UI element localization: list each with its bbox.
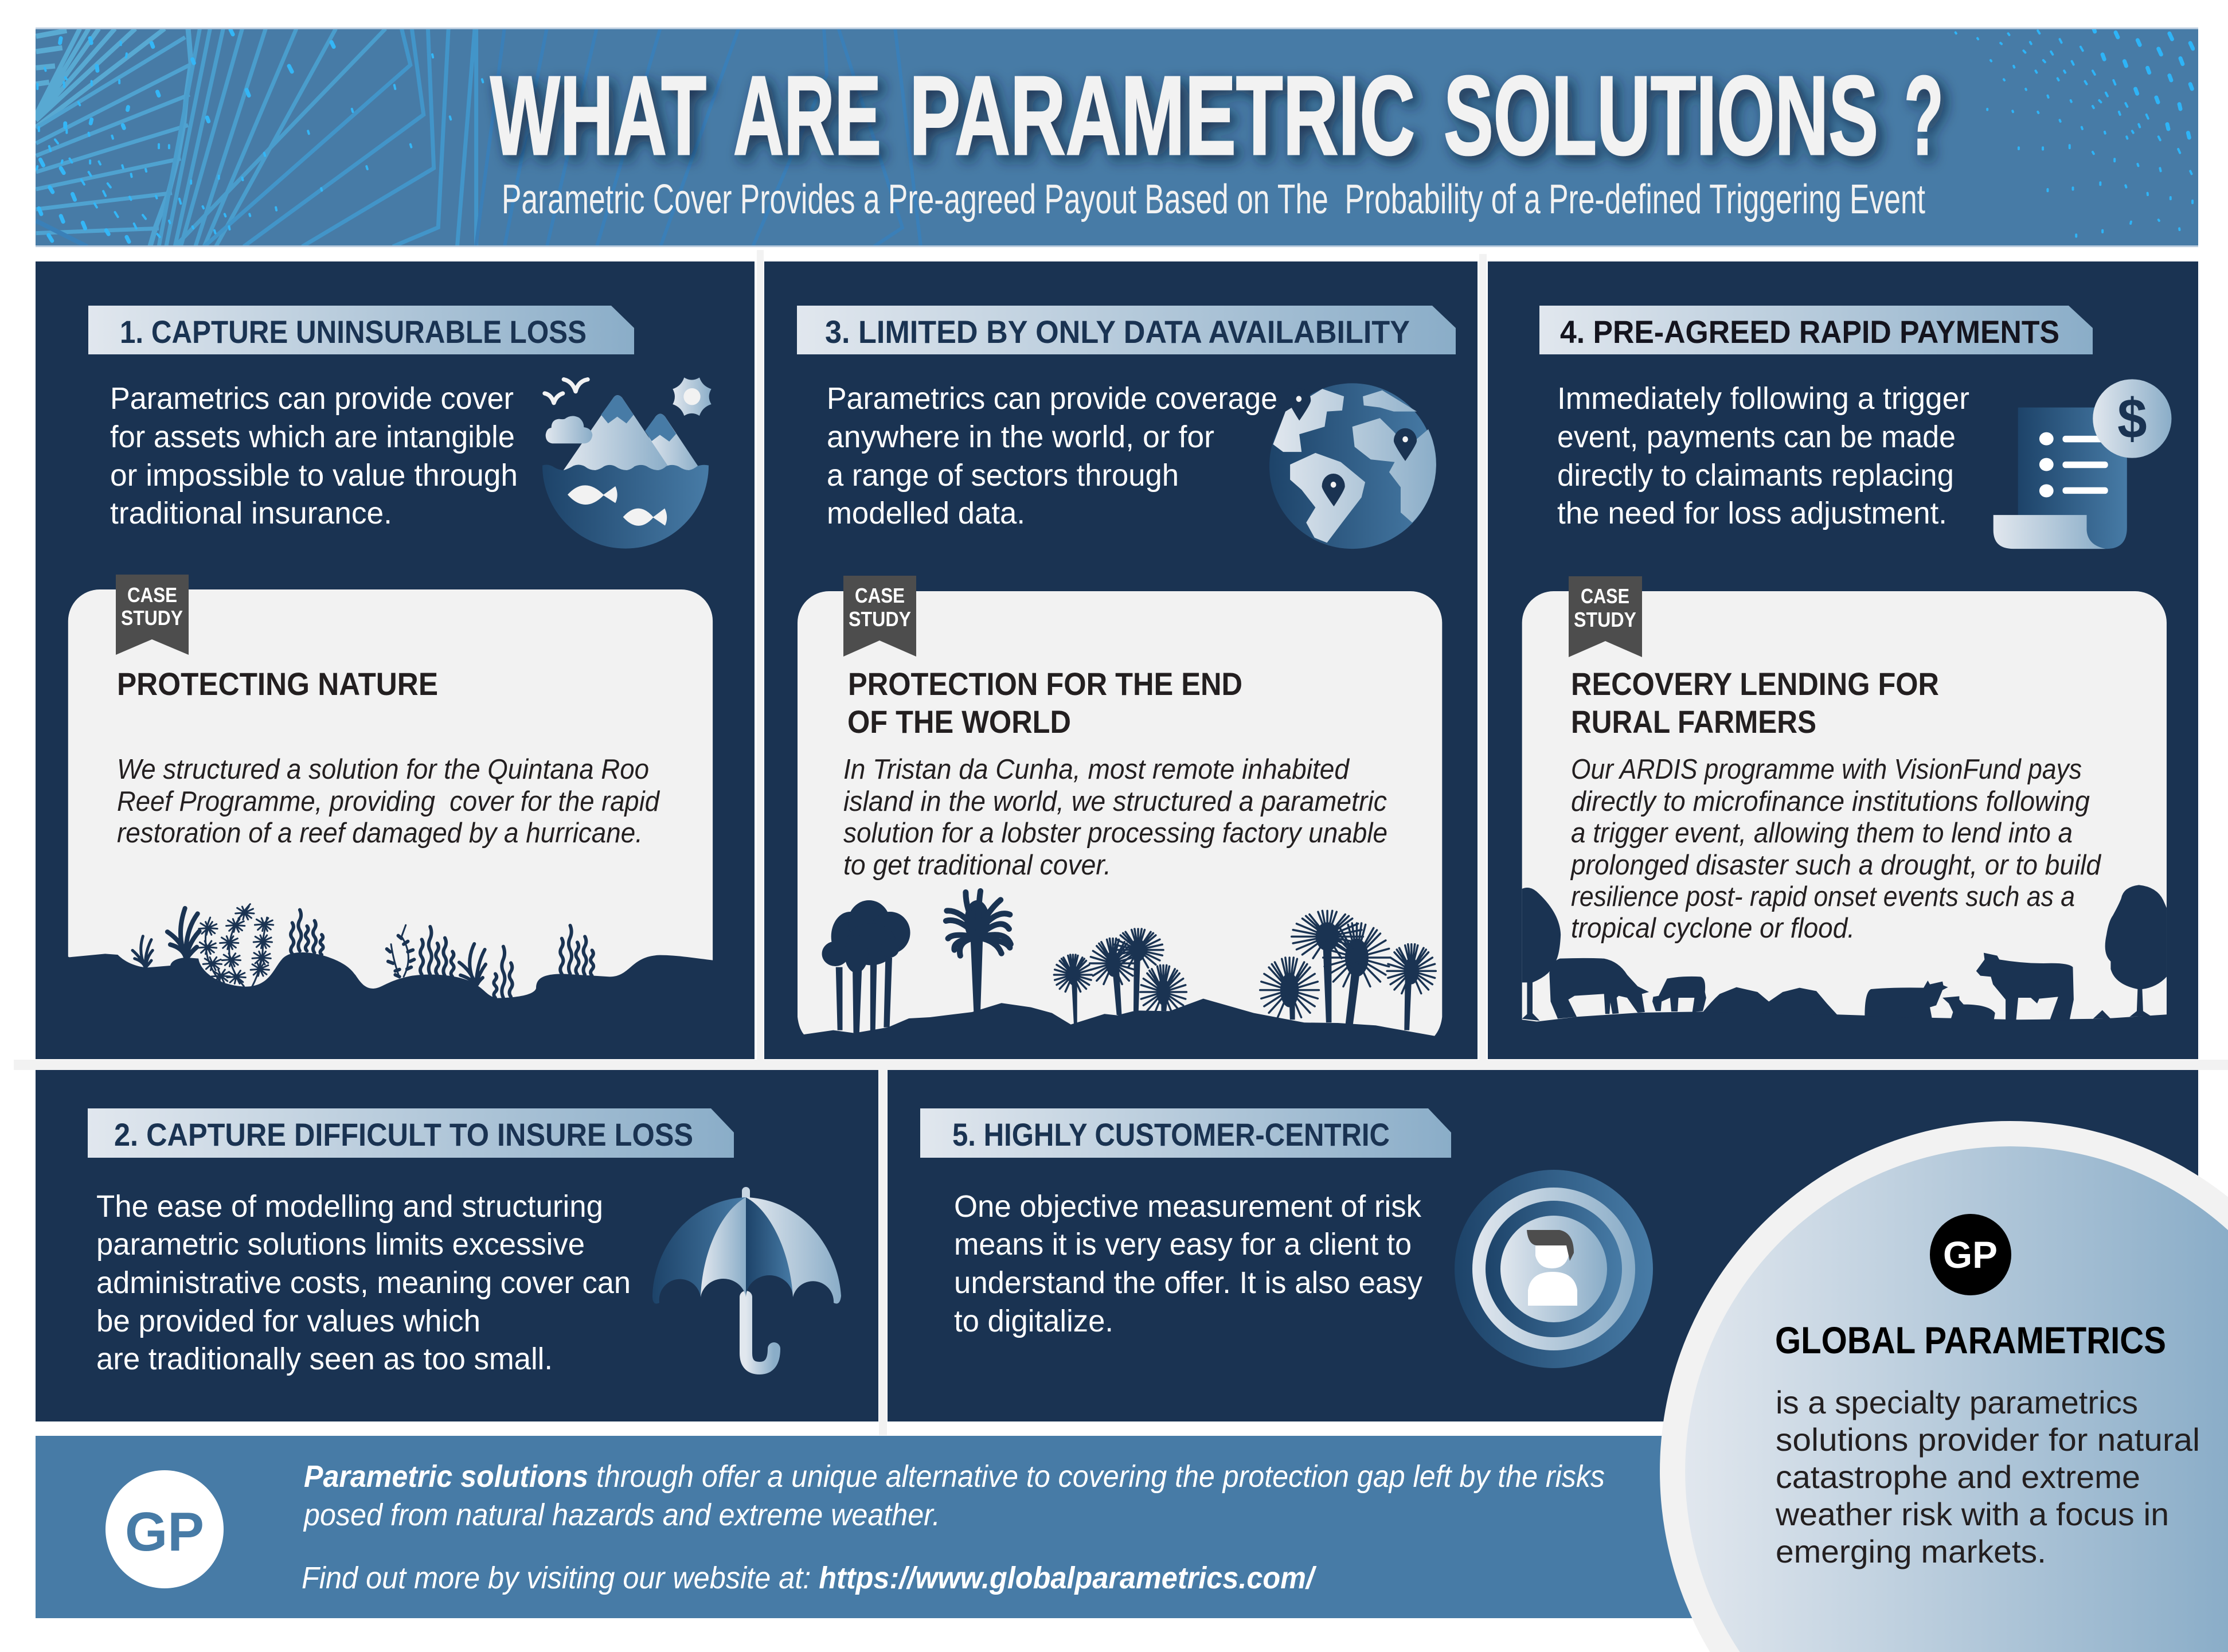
case study ribbon 4: STUDY: [1574, 608, 1636, 631]
case text 1: restoration of a reef damaged by a hurricane.: [117, 818, 643, 849]
panel: highly customer-centric: [888, 1070, 2198, 1421]
case heading 1: PROTECTING NATURE: [117, 666, 438, 702]
body text 2: [96, 1189, 631, 1376]
case study ribbon 4: CASE: [1581, 584, 1629, 608]
case text 4: tropical cyclone or flood.: [1571, 913, 1855, 944]
body text 1: traditional insurance.: [110, 496, 392, 530]
case text 1: We structured a solution for the Quintana Roo: [117, 754, 649, 785]
title: PARAMETRIC: [909, 53, 1415, 178]
icon: payment document with dollar coin: $: [2117, 387, 2147, 450]
decorative dots left: [37, 30, 483, 242]
body text 3: Parametrics can provide coverage: [827, 381, 1277, 416]
ribbon heading 5: 5. HIGHLY CUSTOMER-CENTRIC: [952, 1116, 1390, 1153]
body text 4: Immediately following a trigger: [1557, 381, 1969, 416]
case text 1: [117, 754, 660, 849]
body text 5: to digitalize.: [954, 1304, 1113, 1338]
ribbon heading 1: 1. CAPTURE UNINSURABLE LOSS: [120, 314, 587, 350]
case text 3: In Tristan da Cunha, most remote inhabited: [843, 754, 1350, 785]
company description: catastrophe and extreme: [1776, 1459, 2140, 1495]
ribbon heading 2: [88, 1108, 734, 1158]
title: WHAT: [490, 53, 706, 178]
case text 4: directly to microfinance institutions following: [1571, 786, 2090, 817]
logo: GP white badge: GP: [125, 1501, 204, 1563]
case heading 4: RECOVERY LENDING FOR: [1571, 666, 1939, 702]
company description: is a specialty parametrics: [1776, 1384, 2138, 1420]
illustration: kelp and fronds: [198, 907, 593, 998]
header banner: [36, 28, 2198, 247]
case study card 4: [1522, 576, 2167, 1022]
ribbon heading 2: 2. CAPTURE DIFFICULT TO INSURE LOSS: [114, 1116, 693, 1153]
body text 1: Parametrics can provide cover: [110, 381, 514, 416]
body text 4: event, payments can be made: [1557, 420, 1956, 454]
body text 4: [1557, 381, 1969, 530]
ribbon heading 4: 4. PRE-AGREED RAPID PAYMENTS: [1560, 314, 2059, 350]
case heading 3: [847, 666, 1242, 740]
body text 2: administrative costs, meaning cover can: [96, 1266, 631, 1300]
footer banner: [36, 1436, 1727, 1618]
body text 4: the need for loss adjustment.: [1557, 496, 1947, 530]
logo: GP black badge: GP: [1943, 1233, 1998, 1276]
body text 3: [827, 381, 1277, 530]
body text 2: The ease of modelling and structuring: [96, 1189, 603, 1224]
body text 2: parametric solutions limits excessive: [96, 1227, 585, 1262]
company description: weather risk with a focus in: [1775, 1496, 2169, 1532]
body text 1: [110, 381, 518, 530]
title: [490, 53, 1944, 178]
panel: capture difficult to insure loss: [36, 1070, 878, 1421]
case text 1: Reef Programme, providing cover for the rapid: [117, 786, 660, 817]
case text 4: Our ARDIS programme with VisionFund pays: [1571, 754, 2082, 785]
logo: GP black badge: [1930, 1214, 2011, 1295]
case text 3: [843, 754, 1387, 881]
case heading 4: [1571, 666, 1939, 740]
body text 5: means it is very easy for a client to: [954, 1227, 1412, 1262]
case study ribbon 4: [1569, 576, 1642, 657]
case study card 1: [68, 575, 713, 998]
illustration: palm trees: [822, 891, 1436, 1033]
case heading 3: OF THE WORLD: [847, 704, 1071, 740]
ribbon heading 1: [88, 306, 634, 354]
body text 1: or impossible to value through: [110, 458, 518, 493]
title: ARE: [733, 53, 881, 178]
case study ribbon 3: CASE: [855, 584, 905, 607]
case heading 4: RURAL FARMERS: [1571, 704, 1816, 740]
body text 5: understand the offer. It is also easy: [954, 1266, 1422, 1300]
panel dividers: [14, 250, 2228, 1435]
body text 5: One objective measurement of risk: [954, 1189, 1422, 1224]
ribbon heading 5: [920, 1108, 1451, 1158]
body text 2: are traditionally seen as too small.: [96, 1342, 553, 1376]
footer statement: Parametric solutions through offer a unique alternative to covering the protection gap left by the risks: [304, 1459, 1605, 1494]
case study ribbon 1: CASE: [127, 583, 177, 607]
body text 5: [954, 1189, 1422, 1338]
website link: Find out more by visiting our website at: https://www.globalparametrics.com/: [302, 1561, 1317, 1595]
panel: pre-agreed rapid payments: [1488, 261, 2198, 1059]
case heading 3: PROTECTION FOR THE END: [848, 666, 1242, 702]
case study ribbon 3: STUDY: [849, 607, 911, 631]
panel: capture uninsurable loss: [36, 261, 755, 1059]
icon: sea and mountains: [542, 377, 712, 549]
body text 4: directly to claimants replacing: [1557, 458, 1954, 493]
body text 2: be provided for values which: [96, 1304, 480, 1338]
case text 4: prolonged disaster such a drought, or to build: [1570, 850, 2102, 881]
body text 3: a range of sectors through: [827, 458, 1179, 493]
body text 1: for assets which are intangible: [110, 420, 515, 454]
illustration: reef silhouette: [132, 904, 486, 986]
case text 3: island in the world, we structured a parametric: [843, 786, 1387, 817]
footer statement: posed from natural hazards and extreme weather.: [303, 1498, 940, 1532]
company description: emerging markets.: [1776, 1533, 2046, 1569]
case text 3: solution for a lobster processing factory unable: [843, 818, 1387, 849]
case study ribbon 1: STUDY: [121, 606, 183, 630]
body text 3: modelled data.: [827, 496, 1025, 530]
ribbon heading 3: 3. LIMITED BY ONLY DATA AVAILABILITY: [825, 314, 1410, 350]
title: ?: [1904, 53, 1944, 178]
panel: limited by only data availability: [764, 261, 1477, 1059]
circle panel: global parametrics: [1660, 1121, 2228, 1652]
footer statement: [303, 1459, 1605, 1532]
icon: payment document with dollar coin: [1994, 379, 2171, 549]
body text 3: anywhere in the world, or for: [827, 420, 1214, 454]
decorative dots right: [1956, 29, 2193, 237]
icon: globe with pins: [1269, 383, 1436, 549]
company description: solutions provider for natural: [1776, 1421, 2200, 1458]
case text 4: a trigger event, allowing them to lend into a: [1571, 818, 2073, 849]
case study ribbon 3: [843, 576, 916, 657]
case text 4: resilience post- rapid onset events such as a: [1571, 881, 2075, 912]
company name: GLOBAL PARAMETRICS: [1775, 1319, 2166, 1361]
icon: person in target rings: [1455, 1170, 1653, 1368]
logo: GP white badge: [105, 1470, 224, 1588]
illustration: cattle and trees: [1522, 885, 2167, 1021]
case study card 3: [798, 576, 1442, 1036]
case study ribbon 1: [116, 575, 189, 655]
title: SOLUTIONS: [1444, 53, 1878, 178]
case text 3: to get traditional cover.: [843, 850, 1111, 881]
case text 4: [1570, 754, 2102, 944]
icon: umbrella: [652, 1187, 841, 1368]
company description: [1775, 1384, 2200, 1569]
